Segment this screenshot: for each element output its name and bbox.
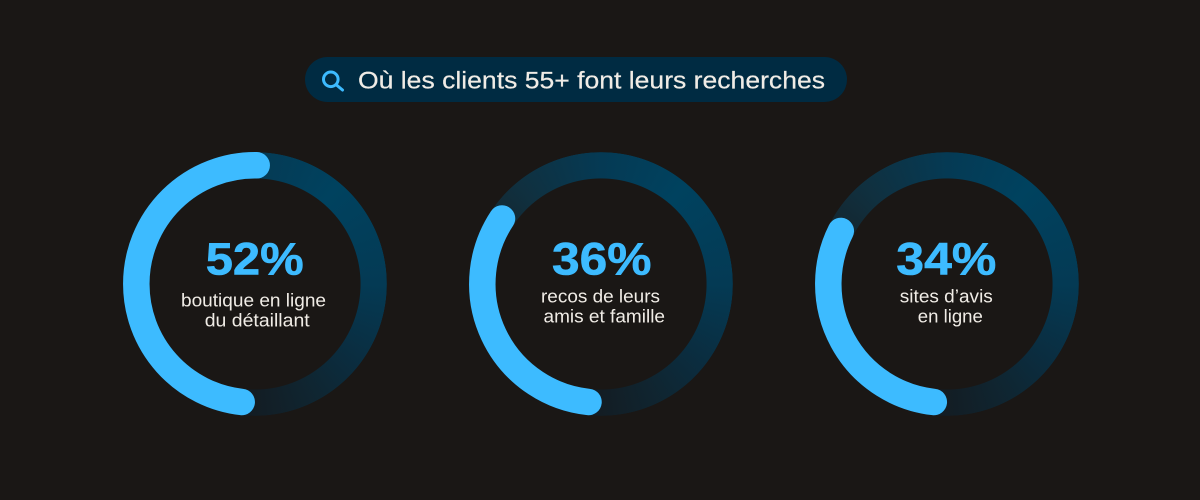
ring track	[469, 152, 733, 416]
value 34%: 34%	[896, 233, 996, 284]
ring track	[815, 152, 1079, 416]
panel: donut 34% sites d'avis	[815, 152, 1079, 416]
value 36%: 36%	[552, 233, 652, 284]
value 52%: 52%	[206, 233, 304, 284]
label: amis et famille	[544, 307, 665, 327]
label: du détaillant	[205, 311, 310, 331]
label: sites d’avis	[899, 287, 992, 307]
label: en ligne	[917, 307, 982, 327]
heading pill	[305, 57, 847, 102]
icon: magnifying glass	[324, 72, 342, 90]
panel: donut 52% boutique en ligne	[123, 152, 387, 416]
label	[899, 287, 992, 327]
progress arc 34%	[828, 231, 933, 402]
label: recos de leurs	[541, 287, 660, 307]
ring track	[197, 152, 387, 416]
label: boutique en ligne	[181, 291, 326, 311]
label	[181, 291, 326, 331]
title: Où les clients 55+ font leurs recherches	[358, 68, 825, 94]
panel: donut 36% recos	[469, 152, 733, 416]
progress arc 52%	[137, 165, 257, 402]
label	[541, 287, 665, 327]
progress arc 36%	[482, 218, 588, 402]
